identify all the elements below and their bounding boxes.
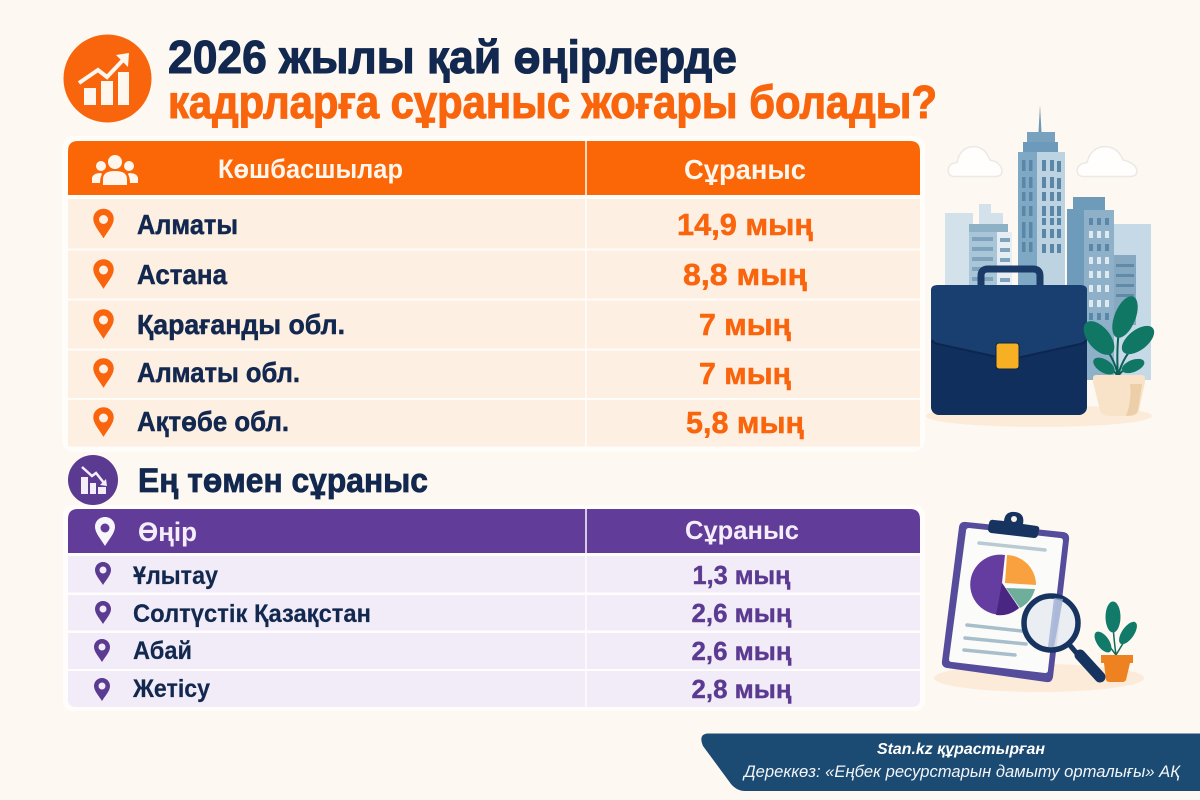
row: Астана [68, 250, 920, 298]
section heading: lowest demand [68, 455, 428, 505]
row: Алматы обл.: Алматы обл. [137, 357, 300, 388]
section heading: lowest demand: Ең төмен сұраныс [138, 462, 428, 500]
row: Солтүстік Қазақстан [68, 595, 920, 630]
row: Абай: Абай [133, 637, 192, 665]
illustration: clipboard and magnifier [934, 512, 1144, 692]
table header: lowest: Сұраныс [685, 515, 799, 545]
table header: leaders: Сұраныс [684, 154, 806, 185]
row: Астана: 8,8 мың [683, 257, 807, 292]
credit: Stan.kz құрастырған [877, 741, 1045, 758]
panel: lowest demand table [63, 505, 925, 711]
row: Жетісу: 2,8 мың [692, 674, 792, 704]
row: Жетісу: Жетісу [132, 675, 210, 703]
row: Алматы обл. [68, 350, 920, 398]
row: Ақтөбе обл.: 5,8 мың [686, 405, 804, 440]
heading line 2: кадрларға сұраныс жоғары болады? [168, 76, 937, 128]
illustration: city and briefcase [926, 105, 1159, 427]
row: Ақтөбе обл.: Ақтөбе обл. [137, 406, 289, 437]
title block [64, 31, 937, 128]
row: Алматы обл.: 7 мың [699, 356, 791, 391]
table header: lowest [68, 509, 920, 553]
clouds [948, 146, 1137, 176]
row: Астана: Астана [137, 259, 227, 290]
row: Қарағанды обл. [68, 300, 920, 348]
icon: people group [92, 155, 138, 185]
table header: leaders: Көшбасшылар [218, 154, 403, 184]
row: Ұлытау [68, 556, 920, 592]
row: Қарағанды обл.: 7 мың [699, 307, 791, 342]
row: Алматы: Алматы [137, 209, 238, 240]
row: Солтүстік Қазақстан: 2,6 мың [692, 598, 792, 628]
icon: magnifier [1024, 596, 1100, 677]
clipboard [942, 512, 1069, 682]
table header: leaders [68, 141, 920, 195]
row: Қарағанды обл.: Қарағанды обл. [137, 309, 345, 340]
pie chart [970, 555, 1036, 615]
panel: leaders table [62, 136, 925, 452]
skyline [945, 105, 1151, 380]
row: Солтүстік Қазақстан: Солтүстік Қазақстан [133, 600, 371, 628]
icon: rising chart [64, 34, 152, 122]
table header: lowest: Өңір [138, 517, 197, 547]
potted plant [1091, 602, 1140, 682]
row: Ұлытау: 1,3 мың [692, 560, 791, 590]
row: Алматы: 14,9 мың [677, 207, 813, 242]
source line: Дереккөз: «Еңбек ресурстарын дамыту орталығы» АҚ [742, 762, 1181, 781]
row: Жетісу [68, 671, 920, 707]
row: Абай [68, 633, 920, 669]
heading line 1: 2026 жылы қай өңірлерде [168, 31, 737, 83]
icon: falling chart [68, 455, 118, 505]
icon: briefcase [931, 269, 1087, 415]
row: Ақтөбе обл. [68, 400, 920, 446]
source footer [701, 734, 1200, 791]
row: Абай: 2,6 мың [692, 636, 792, 666]
row: Ұлытау: Ұлытау [133, 562, 218, 590]
icon: potted plant [1078, 293, 1159, 416]
row: Алматы [68, 199, 920, 248]
icon: white pin [95, 517, 115, 546]
